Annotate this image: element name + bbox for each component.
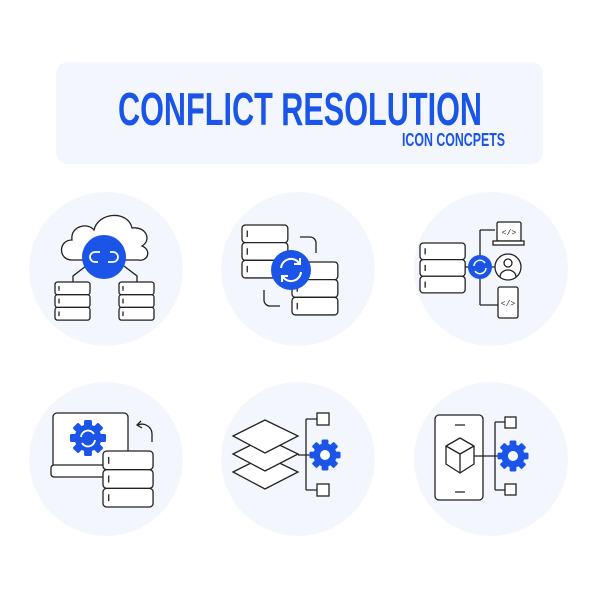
icon: laptop settings with server xyxy=(29,382,183,536)
icon: server to devices: </> xyxy=(502,229,516,238)
icon: server sync xyxy=(221,192,375,346)
icon: mobile cube settings xyxy=(414,382,568,536)
title panel xyxy=(56,62,543,164)
icon: server to devices: </> xyxy=(501,300,515,309)
icon: cloud sync servers xyxy=(29,192,183,346)
icon: layers settings xyxy=(221,382,375,536)
icon: server to devices xyxy=(414,192,568,346)
subtitle: ICON CONCPETS xyxy=(402,130,505,150)
